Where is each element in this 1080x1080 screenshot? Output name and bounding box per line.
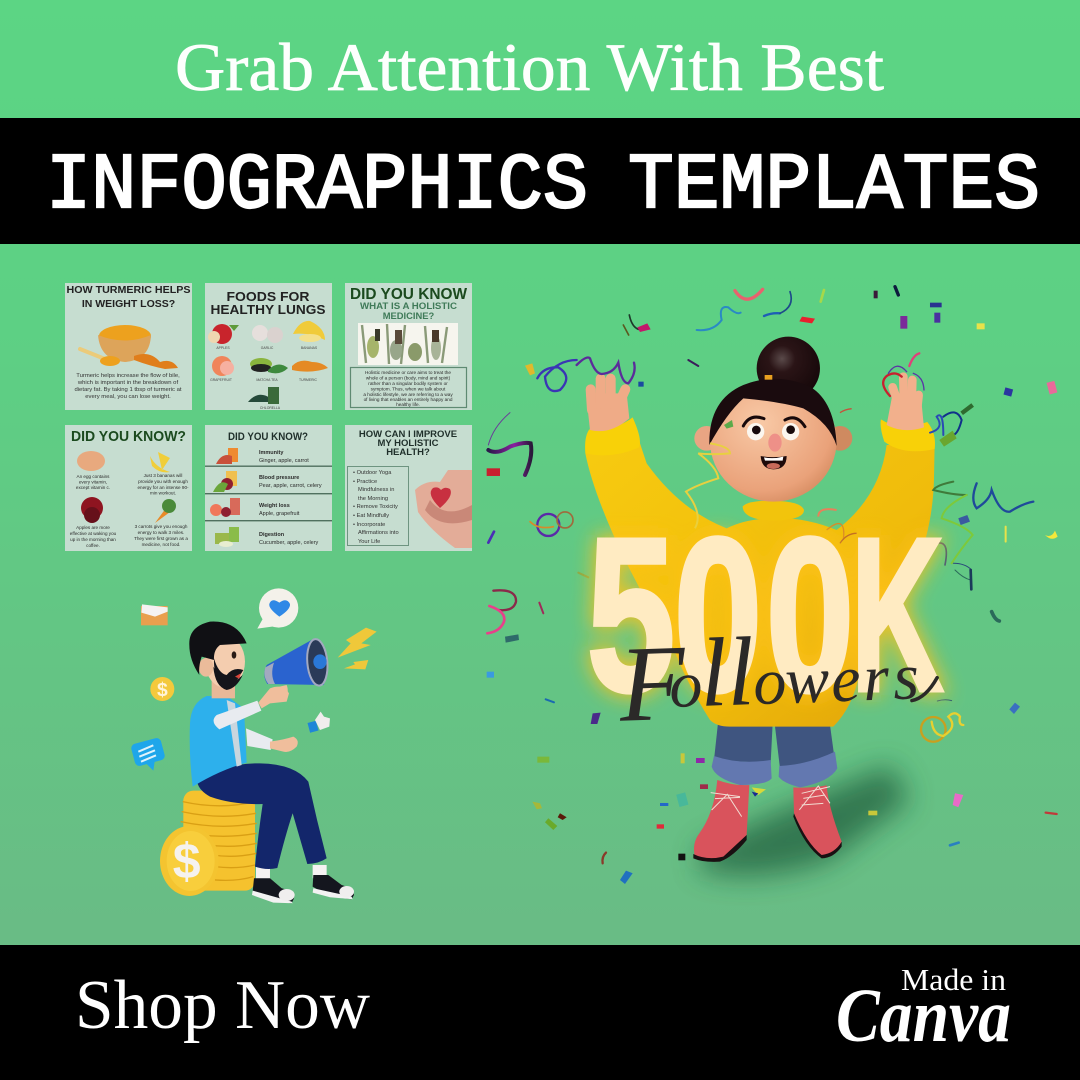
thumbnail: foods for healthy lungs: GRAPEFRUIT — [210, 378, 232, 382]
big number: 500K: 0 — [766, 494, 854, 737]
icon: chat bubble — [130, 737, 166, 771]
thumbnail: did you know facts: DID YOU KNOW? — [71, 428, 186, 445]
script label: Followers: l — [698, 619, 729, 728]
thumbnail: improve holistic health: MY HOLISTIC — [377, 438, 439, 449]
thumbnail: improve holistic health — [345, 425, 472, 551]
thumbnail: did you know facts: Just 3 bananas will — [144, 473, 182, 478]
title: Infographics Templates: INFOGRAPHICS — [46, 141, 588, 231]
icon: heart speech bubble — [257, 588, 298, 629]
thumbnail: turmeric weight loss: IN WEIGHT LOSS? — [82, 298, 175, 310]
call to action: Shop Now: Shop Now — [75, 967, 370, 1044]
thumbnail: did you know facts: effective at waking you — [70, 531, 117, 536]
script label: Followers: F — [616, 623, 688, 745]
script label: Followers: w — [784, 643, 830, 718]
big number: 500K: K — [851, 494, 943, 737]
thumbnail: did you know juices — [205, 425, 332, 551]
thumbnail: what is a holistic medicine: healthy life. — [396, 402, 420, 407]
icon: thumbs up — [308, 712, 330, 733]
thumbnail: did you know facts: They were first grown as a — [134, 536, 188, 541]
big number: 500K: 0 — [674, 494, 762, 737]
thumbnail: improve holistic health: the Morning — [358, 496, 388, 502]
illustration: woman celebrating — [585, 337, 935, 862]
thumbnail: did you know facts — [65, 425, 192, 551]
script label: Followers: l — [725, 618, 756, 727]
thumbnail: what is a holistic medicine: symptom. Thus, when we talk about — [371, 386, 446, 392]
thumbnail: did you know facts: energy to walk 3 miles. — [138, 530, 184, 535]
thumbnail: improve holistic health: Mindfulness in — [358, 487, 394, 493]
icon: megaphone — [263, 638, 329, 701]
thumbnail: did you know facts: Apples are more — [76, 525, 110, 530]
thumbnail: did you know juices: Cucumber, apple, celery — [259, 540, 319, 546]
thumbnail: did you know facts: medicine, not food. — [142, 542, 180, 547]
thumbnail: did you know facts: energy for an intense 90- — [137, 485, 189, 490]
figure: arms — [214, 687, 298, 752]
confetti: lower right — [921, 570, 1057, 845]
figure: head — [694, 337, 852, 502]
icon: lightning bolts — [338, 628, 377, 669]
title banner — [0, 118, 1080, 244]
thumbnail: improve holistic health: HEALTH? — [386, 447, 430, 458]
thumbnail: what is a holistic medicine: rather than a singular bodily system or — [368, 381, 448, 386]
figure: head — [189, 622, 247, 698]
figure: shirt — [190, 696, 247, 787]
figure: left boot — [693, 780, 749, 862]
thumbnail: turmeric weight loss: Turmeric helps increase the flow of bile, — [76, 373, 180, 379]
thumbnail: did you know juices: Ginger, apple, carrot — [259, 458, 309, 464]
confetti: upper right — [780, 287, 1058, 570]
thumbnail: did you know facts: provide you with enough — [138, 479, 188, 484]
thumbnail: foods for healthy lungs: CHLORELLA — [260, 406, 281, 410]
thumbnail: turmeric weight loss: which is important in the breakdown of — [77, 380, 178, 386]
thumbnail: did you know facts: except vitamin c. — [76, 485, 110, 490]
gold streamer on face — [686, 443, 730, 528]
thumbnail: did you know facts: coffee. — [86, 543, 100, 548]
title: Infographics Templates: TEMPLATES — [628, 141, 1040, 231]
big number: 500K glow — [587, 494, 943, 737]
big number: 500K glow: 0 — [766, 494, 854, 737]
coin stack: $ — [173, 833, 201, 889]
thumbnail: foods for healthy lungs: FOODS FOR — [226, 289, 310, 304]
thumbnail: what is a holistic medicine: Holistic medicine or care aims to treat the — [365, 370, 451, 375]
thumbnail: foods for healthy lungs: TURMERIC — [299, 378, 317, 382]
thumbnail: did you know juices: Digestion — [259, 532, 285, 538]
script label: Followers — [616, 612, 939, 745]
thumbnail: foods for healthy lungs: HEALTHY LUNGS — [210, 302, 326, 317]
big number: 500K glow: 5 — [587, 494, 675, 737]
big number: 500K glow: 0 — [674, 494, 762, 737]
illustration: man with megaphone on coins — [130, 588, 377, 903]
footer banner — [0, 945, 1080, 1080]
thumbnail: did you know juices: Immunity — [259, 450, 284, 456]
icon: envelope — [141, 604, 168, 625]
thumbnail: did you know facts: every vitamin, — [79, 480, 107, 484]
badge: Made in Canva: Canva — [836, 974, 1011, 1058]
thumbnail: foods for healthy lungs: BANANAS — [301, 346, 318, 350]
thumbnail: improve holistic health: Affirmations into — [358, 530, 399, 536]
figure: trousers — [712, 720, 837, 787]
thumbnail: did you know facts: 3 carrots give you enough — [135, 524, 188, 529]
big number: 500K: 5 — [587, 494, 675, 737]
thumbnail: what is a holistic medicine: WHAT IS A HOLISTIC — [360, 300, 457, 311]
thumbnail: improve holistic health: Your Life — [358, 539, 380, 545]
figure: right boot — [793, 785, 842, 858]
shadow under character — [700, 765, 910, 876]
thumbnail: improve holistic health: • Practice — [353, 479, 377, 485]
thumbnail: foods for healthy lungs: GARLIC — [261, 346, 274, 350]
thumbnail: did you know facts: An egg contains — [77, 474, 110, 479]
thumbnail: turmeric weight loss: dietary fat. By taking 1 tbsp of turmeric at — [74, 387, 182, 393]
thumbnail: turmeric weight loss: HOW TURMERIC HELPS — [66, 284, 190, 296]
badge: Made in Canva: Made in — [901, 962, 1007, 997]
icon: dollar coin — [150, 677, 174, 701]
thumbnail: did you know juices: DID YOU KNOW? — [228, 431, 308, 443]
thumbnail: foods for healthy lungs: APPLES — [216, 346, 230, 350]
thumbnail: did you know juices: Pear, apple, carrot, celery — [259, 483, 322, 489]
thumbnail: did you know facts: min workout. — [150, 490, 176, 496]
icon: dollar coin: $ — [157, 680, 168, 701]
script label: Followers: s — [892, 640, 920, 714]
figure: shoes — [252, 865, 354, 903]
coin stack — [160, 791, 257, 896]
thumbnail: what is a holistic medicine: a holistic lifestyle, we are referring to a way — [363, 392, 453, 397]
thumbnail: what is a holistic medicine: DID YOU KNOW — [350, 286, 467, 303]
upper body — [585, 337, 935, 727]
thumbnail: what is a holistic medicine: MEDICINE? — [383, 310, 435, 321]
thumbnail: improve holistic health: • Remove Toxicity — [353, 504, 398, 510]
big number: 500K — [587, 494, 943, 737]
thumbnail: turmeric weight loss — [65, 283, 192, 410]
confetti: upper left — [487, 289, 780, 543]
panel: infographic thumbnails — [65, 283, 472, 551]
thumbnail: what is a holistic medicine — [345, 283, 472, 410]
figure: hands — [586, 377, 924, 431]
script label: Followers: r — [862, 641, 890, 715]
headline: Grab Attention With Best: Grab Attention With Best — [175, 29, 884, 105]
confetti near boots — [657, 753, 877, 860]
thumbnail: did you know facts: up in the morning than — [70, 537, 116, 542]
figure: sweater — [585, 417, 935, 727]
title: Infographics Templates — [46, 141, 1040, 231]
thumbnail: did you know juices: Weight loss — [259, 503, 290, 509]
thumbnail: improve holistic health: • Outdoor Yoga — [353, 470, 392, 476]
thumbnail: what is a holistic medicine: whole of a person (body, mind and spirit) — [366, 376, 451, 380]
thumbnail: what is a holistic medicine: of living that enables an entirely happy and — [364, 397, 453, 402]
thumbnail: foods for healthy lungs — [205, 283, 332, 410]
big number: 500K glow: K — [851, 494, 943, 737]
coral streamers on shoulder — [818, 509, 857, 543]
thumbnail: improve holistic health: • Eat Mindfully — [353, 513, 389, 519]
thumbnail: improve holistic health: HOW CAN I IMPROVE — [359, 429, 457, 440]
thumbnail: turmeric weight loss: every meal, you can lose weight. — [85, 394, 171, 400]
thumbnail: foods for healthy lungs: MATCHA TEA — [256, 378, 278, 382]
confetti: lower left — [487, 573, 633, 884]
script label: Followers: o — [668, 648, 704, 722]
script label: Followers: e — [830, 642, 862, 716]
figure: trousers — [197, 763, 327, 869]
thumbnail: did you know juices: Blood pressure — [259, 475, 299, 481]
thumbnail: improve holistic health: • Incorporate — [353, 522, 385, 528]
legs and boots — [657, 720, 877, 862]
script label: Followers: o — [752, 645, 787, 719]
thumbnail: did you know juices: Apple, grapefruit — [259, 511, 300, 517]
